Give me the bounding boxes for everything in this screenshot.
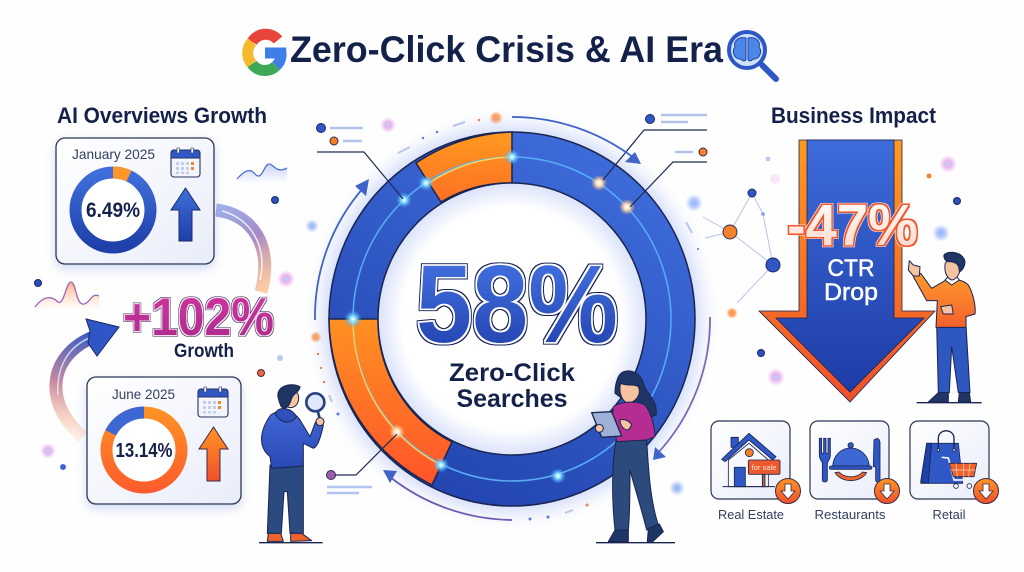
label: Restaurants: Restaurants: [814, 507, 886, 522]
donut chart: 6.49%: [76, 172, 150, 248]
panel: Real Estate: [711, 421, 800, 522]
icon: cloche and cutlery: [819, 438, 880, 482]
ring: left orange segment: [329, 319, 452, 485]
decorative particles: [34, 111, 960, 520]
icon: magnifier with brain: [729, 32, 776, 79]
big stat: 58%: 58%: [416, 243, 618, 366]
figure: woman with tablet: [592, 371, 675, 543]
label: Growth: Growth: [174, 341, 234, 362]
label: CTR Drop: Drop: [824, 279, 878, 306]
figure: man with magnifier: [259, 385, 324, 543]
arrow: up blue: [171, 188, 200, 241]
ring: blue segments: [329, 132, 695, 506]
title: [248, 29, 776, 79]
label: CTR Drop: [824, 255, 878, 306]
badge: down: [776, 478, 800, 504]
donut chart: 6.49%: 6.49%: [86, 199, 140, 222]
icon: bag and cart: [921, 431, 977, 488]
panel: June 2025: [87, 377, 241, 504]
figure: man pointing: [908, 252, 982, 403]
big stat: -47%: -47%: [787, 193, 918, 258]
heading: AI Overviews Growth: AI Overviews Growth: [57, 103, 267, 128]
label: June 2025: June 2025: [112, 386, 175, 402]
ring: inner circle: [378, 183, 646, 455]
arrow: ring top left: [315, 179, 369, 320]
arrow: big down arrow: [759, 140, 935, 402]
icon: google G: [248, 34, 281, 71]
callout: +102% growth: +102%: [123, 288, 274, 347]
label: Zero-Click Searches: Zero-Click: [449, 359, 575, 387]
arrow: ring bottom left: [383, 470, 512, 520]
ring: top orange segment: [416, 132, 512, 202]
chart: network nodes: [703, 189, 780, 303]
label: January 2025: January 2025: [72, 146, 155, 162]
ring: glow nodes: [344, 149, 635, 484]
sparkline: lower: [35, 282, 99, 310]
callout: top-left leader: [316, 124, 403, 199]
donut chart: 13.14%: 13.14%: [116, 440, 173, 462]
icon: house for sale: for sale: [751, 463, 777, 472]
ring: light track: [353, 157, 671, 481]
panel: ring glow: [323, 126, 701, 512]
badge: down: [974, 478, 998, 504]
panel: Restaurants: [810, 421, 900, 522]
sparkline: upper: [237, 164, 287, 183]
arrow: ring right: [653, 317, 710, 460]
label: CTR Drop: CTR: [828, 255, 874, 282]
label: Zero-Click Searches: Searches: [456, 385, 568, 413]
arrow: upper growth arc: [216, 210, 265, 292]
label: Zero-Click Searches: [449, 359, 575, 413]
callout: bottom-left leader: [326, 434, 397, 493]
callout: top-right leaders: [603, 114, 707, 207]
panel: January 2025: [56, 138, 214, 264]
icon: calendar: [171, 148, 200, 177]
label: Real Estate: Real Estate: [718, 507, 784, 522]
title text: Zero-Click Crisis & AI Era: [290, 29, 723, 70]
arrow: up orange: [199, 427, 228, 481]
icon: calendar: [198, 387, 228, 417]
panel: Retail: [910, 421, 998, 522]
heading: Business Impact: Business Impact: [771, 103, 937, 128]
label: Retail: Retail: [932, 507, 966, 522]
badge: down: [874, 478, 900, 504]
arrow: ring top right: [512, 117, 641, 164]
donut chart: 58% zero-click ring: [329, 132, 695, 506]
arrow: lower growth arc: [56, 319, 119, 437]
donut chart: 13.14%: [106, 412, 182, 488]
